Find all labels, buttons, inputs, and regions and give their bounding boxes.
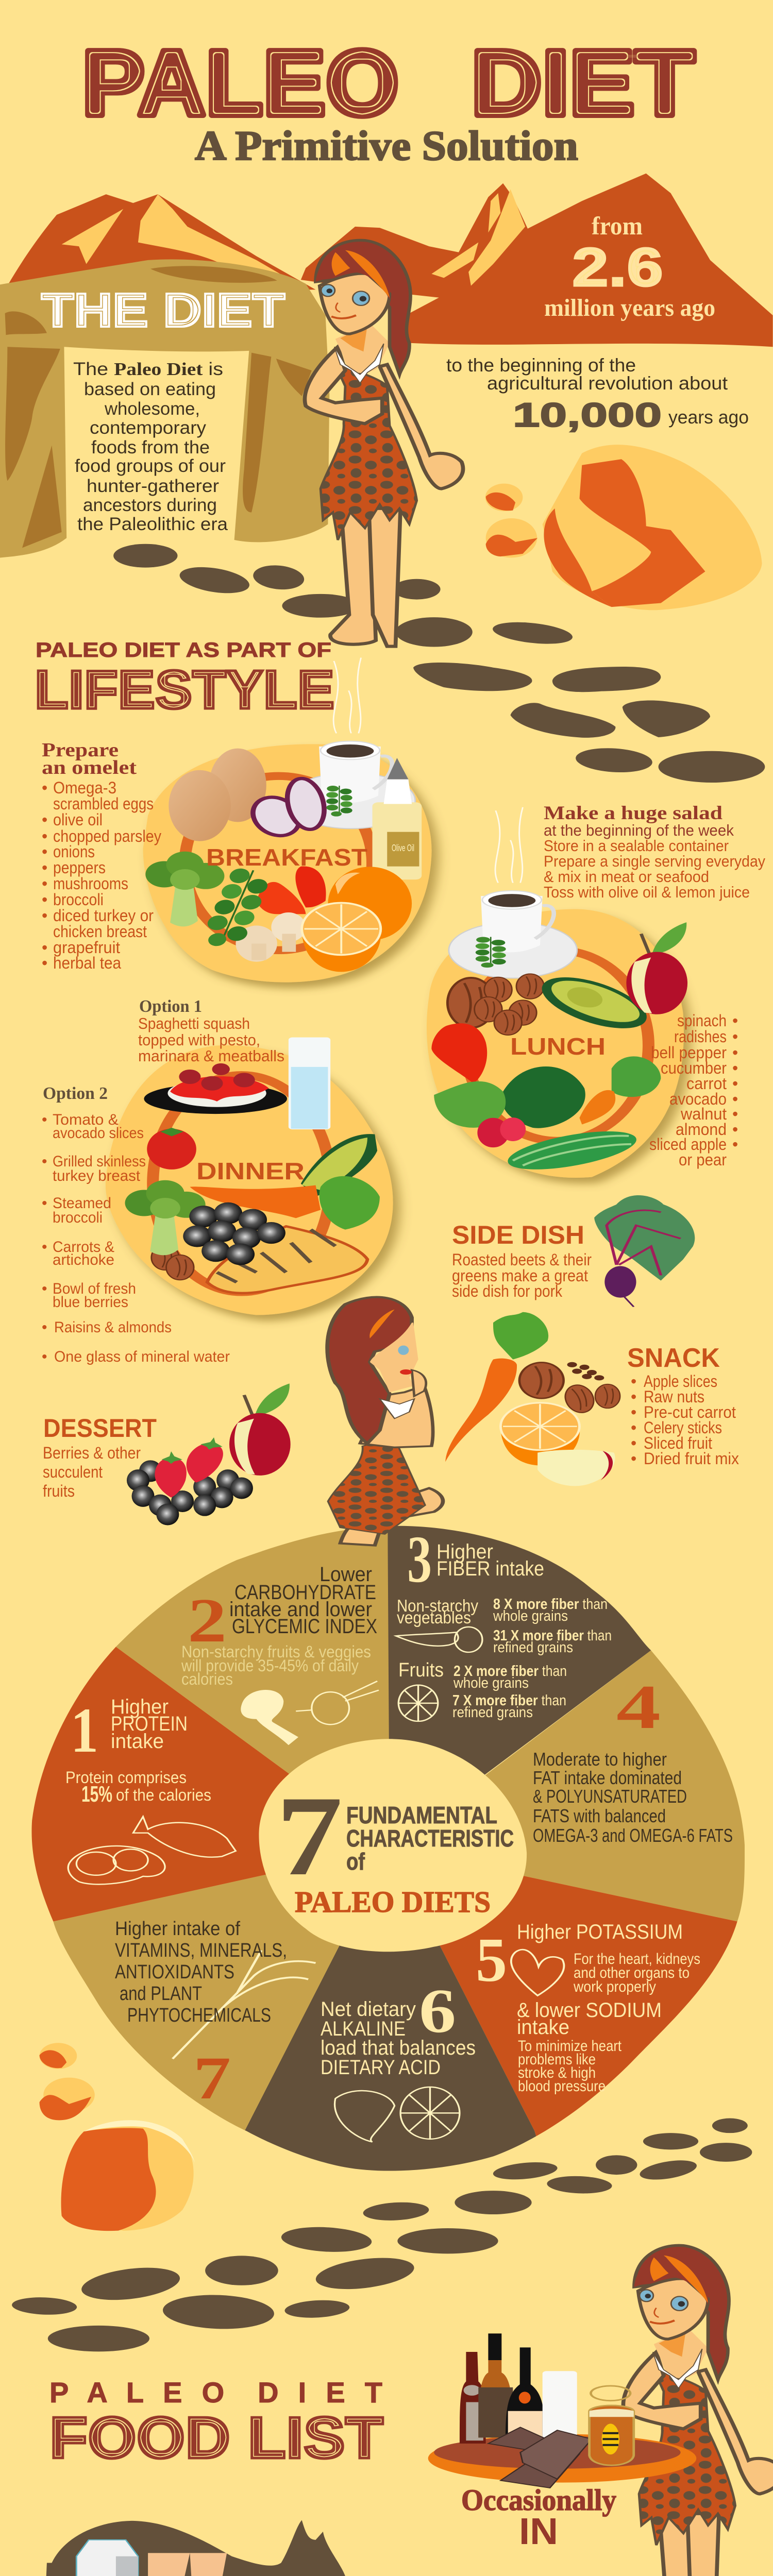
list: lunch ingredients: radishes	[674, 1027, 727, 1046]
text: the diet description: wholesome,	[104, 399, 200, 419]
segment 3: higher fiber: Fruits	[398, 1659, 444, 1681]
segment 4: moderate to higher fat: Moderate to higher	[533, 1749, 667, 1770]
text: dinner option 2: Carrots &	[53, 1239, 114, 1256]
segment 2: lower carbohydrate: CARBOHYDRATE	[234, 1581, 376, 1604]
heading: snack: SNACK	[627, 1343, 720, 1373]
text: dinner option 2: Steamed	[53, 1195, 111, 1212]
list: snack items: Sliced fruit	[644, 1434, 712, 1452]
segment 5: potassium and sodium: 5	[476, 1925, 507, 1995]
heading: side dish: SIDE DISH	[452, 1221, 584, 1249]
segment 1: higher protein	[65, 1695, 211, 1807]
list: lunch ingredients: •	[732, 1027, 738, 1046]
text: the diet description: food groups of our	[75, 456, 226, 476]
segment 7: vitamins and minerals: VITAMINS, MINERALS,	[115, 1940, 287, 1961]
text: prepare an omelet: herbal tea	[53, 954, 121, 972]
text: prepare an omelet: Prepare	[42, 739, 119, 761]
heading: paleo diet food list: FOOD LIST	[49, 2405, 383, 2471]
list: lunch ingredients: •	[732, 1090, 738, 1108]
character: woman with tray	[623, 2245, 773, 2576]
subtitle: A Primitive Solution	[195, 122, 578, 169]
label: lunch: LUNCH	[510, 1033, 606, 1060]
footprints: middle trail	[11, 2118, 752, 2351]
text: prepare an omelet: •	[42, 827, 47, 845]
text: prepare an omelet: mushrooms	[53, 874, 128, 893]
text: dessert description: fruits	[43, 1482, 75, 1500]
text: dinner option 2: broccoli	[53, 1209, 103, 1226]
segment 1: higher protein: intake	[111, 1730, 164, 1753]
center: 7 fundamental characteristic of paleo diets: 7	[276, 1773, 343, 1900]
icon: beet	[594, 1195, 695, 1307]
text: dinner option 2: •	[42, 1153, 47, 1170]
list: lunch ingredients: cucumber	[661, 1059, 727, 1077]
segment 3: higher fiber: 8 X more fiber than	[493, 1596, 608, 1613]
text: the diet description: contemporary	[90, 418, 207, 438]
heading: paleo diet food list	[49, 2376, 383, 2471]
segment 3: higher fiber: 2 X more fiber than	[453, 1663, 567, 1680]
text: the diet description: ancestors during	[83, 495, 217, 515]
text: dinner option 2: blue berries	[53, 1294, 128, 1311]
label: occasionally in	[461, 2483, 616, 2552]
segment 5: potassium and sodium: To minimize heart	[518, 2038, 622, 2055]
segment 2: lower carbohydrate: 2	[188, 1586, 227, 1655]
label: occasionally in: Occasionally	[461, 2483, 616, 2517]
list: snack items: •	[631, 1434, 636, 1452]
list: lunch ingredients: •	[732, 1120, 738, 1139]
text: the diet description: the Paleolithic era	[77, 514, 228, 534]
segment 7: vitamins and minerals: 7	[193, 2044, 231, 2112]
list: lunch ingredients: •	[732, 1043, 738, 1062]
text: dinner option 1: Spaghetti squash	[138, 1014, 250, 1032]
text: dessert description: Berries & other	[43, 1444, 141, 1462]
list: lunch ingredients: avocado	[669, 1090, 727, 1108]
text: prepare an omelet: •	[42, 778, 47, 797]
segment 2: lower carbohydrate: intake and lower	[229, 1598, 372, 1621]
segment 4: moderate to higher fat	[533, 1672, 733, 1846]
list: lunch ingredients: •	[732, 1011, 738, 1030]
segment 3: higher fiber: Non-starchy	[397, 1596, 478, 1615]
label: olive oil: Olive Oil	[392, 843, 414, 853]
out foods: boar	[17, 2520, 414, 2576]
text: make a huge salad: & mix in meat or seafood	[544, 868, 709, 886]
text: prepare an omelet: diced turkey or	[53, 906, 154, 925]
list: lunch ingredients: •	[732, 1105, 738, 1123]
text: side dish description: Roasted beets & their	[452, 1250, 592, 1269]
segment 3: higher fiber: 31 X more fiber than	[493, 1628, 612, 1644]
segment 2: lower carbohydrate: GLYCEMIC INDEX	[232, 1615, 377, 1638]
list: snack items: Raw nuts	[644, 1387, 704, 1406]
segment 5: potassium and sodium: work properly	[573, 1978, 656, 1995]
text: to the agricultural revolution	[446, 354, 749, 434]
segment 3: higher fiber: vegetables	[397, 1608, 471, 1627]
text: dinner option 1: Option 1	[139, 997, 202, 1016]
text: prepare an omelet: chicken breast	[53, 922, 147, 941]
text: prepare an omelet: peppers	[53, 858, 106, 877]
text: prepare an omelet: •	[42, 874, 47, 893]
segment 6: net dietary alkaline: Net dietary	[321, 1998, 416, 2021]
text: dinner option 2	[42, 1084, 230, 1365]
list: lunch ingredients: •	[732, 1074, 738, 1093]
text: dinner option 2: •	[42, 1239, 47, 1256]
label: dinner: DINNER	[196, 1158, 305, 1184]
segment 5: potassium and sodium: intake	[517, 2016, 569, 2039]
text: prepare an omelet: •	[42, 890, 47, 909]
heading: paleo diet food list: P A L E O D I E T	[49, 2376, 382, 2409]
title	[82, 31, 695, 135]
text: make a huge salad	[544, 803, 765, 901]
chart: seven characteristics wheel	[25, 1522, 750, 2175]
segment 1: higher protein: Protein comprises	[65, 1768, 187, 1787]
scene: mountains	[7, 174, 773, 347]
segment 2: lower carbohydrate: Non-starchy fruits & veggies	[181, 1642, 371, 1661]
heading: the diet: THE DIET	[41, 283, 285, 337]
segment 3: higher fiber: 3	[407, 1522, 432, 1597]
text: dinner option 2: turkey breast	[53, 1167, 141, 1184]
footprints: top	[113, 544, 441, 618]
segment 2: lower carbohydrate: Lower	[320, 1563, 372, 1586]
text: prepare an omelet: •	[42, 810, 47, 829]
list: snack items: •	[631, 1387, 636, 1406]
list: snack items: •	[631, 1449, 636, 1468]
list: lunch ingredients: •	[732, 1059, 738, 1077]
timeline: from 2.6 million years ago: from	[592, 211, 643, 240]
segment 6: net dietary alkaline	[321, 1976, 476, 2079]
list: snack items: •	[631, 1403, 636, 1421]
text: side dish description: side dish for pork	[452, 1282, 563, 1300]
list: snack items: •	[631, 1372, 636, 1391]
segment 1: higher protein: 15%	[81, 1782, 112, 1807]
segment 1: higher protein: PROTEIN	[111, 1713, 188, 1735]
timeline: from 2.6 million years ago: 2.6	[572, 237, 663, 298]
text: prepare an omelet: •	[42, 858, 47, 877]
text: prepare an omelet: an omelet	[42, 757, 137, 778]
plate: breakfast	[143, 658, 432, 982]
segment 6: net dietary alkaline: DIETARY ACID	[321, 2056, 441, 2079]
segment 6: net dietary alkaline: 6	[419, 1976, 456, 2046]
text: prepare an omelet: Omega-3	[53, 778, 116, 797]
list: lunch ingredients: sliced apple	[649, 1135, 727, 1154]
text: side dish description	[452, 1250, 592, 1300]
segment 2: lower carbohydrate: calories	[181, 1670, 233, 1688]
segment 4: moderate to higher fat: & POLYUNSATURATED	[533, 1786, 687, 1807]
text: make a huge salad: at the beginning of the week	[544, 821, 734, 839]
list: snack items	[631, 1372, 739, 1468]
icon: carrot and citrus	[396, 1627, 482, 1721]
heading: paleo diet as part of lifestyle: PALEO DIET AS PART OF	[36, 639, 331, 662]
segment 5: potassium and sodium: For the heart, kidneys	[574, 1951, 700, 1968]
text: to the agricultural revolution: agricultural revolution about	[487, 372, 728, 394]
text: the diet description: foods from the	[91, 437, 210, 457]
text: prepare an omelet: •	[42, 954, 47, 972]
list: lunch ingredients: walnut	[680, 1105, 727, 1123]
text: prepare an omelet: onions	[53, 842, 95, 861]
text: to the agricultural revolution: years ago	[668, 406, 749, 428]
text: the diet description: based on eating	[84, 379, 216, 399]
text: dinner option 1: topped with pesto,	[138, 1031, 260, 1049]
icon: fish and meat	[68, 1817, 236, 1884]
segment 4: moderate to higher fat: FATS with balanced	[533, 1805, 666, 1826]
text: dinner option 2: Option 2	[43, 1084, 108, 1103]
segment 3: higher fiber: refined grains	[452, 1704, 533, 1721]
text: prepare an omelet: chopped parsley	[53, 827, 161, 845]
center: 7 fundamental characteristic of paleo diets: FUNDAMENTAL	[346, 1802, 497, 1828]
list: lunch ingredients	[649, 1011, 738, 1169]
list: snack items: Dried fruit mix	[644, 1449, 739, 1468]
segment 7: vitamins and minerals: and PLANT	[120, 1983, 202, 2005]
icon: wheat	[173, 1951, 315, 2059]
list: snack items: Pre-cut carrot	[644, 1403, 736, 1421]
segment 5: potassium and sodium: problems like	[518, 2051, 596, 2068]
icon: leaf and citrus	[335, 2087, 460, 2142]
text: prepare an omelet: olive oil	[53, 810, 103, 829]
list: snack items: •	[631, 1418, 636, 1437]
segment 4: moderate to higher fat: FAT intake dominated	[533, 1767, 682, 1788]
segment 5: potassium and sodium: blood pressure	[518, 2078, 606, 2095]
segment 2: lower carbohydrate: will provide 35-45% of daily	[181, 1656, 359, 1675]
list: snack items: Celery sticks	[644, 1418, 722, 1437]
center: 7 fundamental characteristic of paleo diets: PALEO DIETS	[295, 1885, 491, 1919]
icon: heart	[511, 1950, 564, 1995]
plate: lunch	[427, 807, 687, 1178]
heading: paleo diet as part of lifestyle: LIFESTYLE	[35, 659, 334, 720]
text: dinner option 2: artichoke	[53, 1251, 114, 1268]
scene: stone dolmen	[0, 259, 329, 557]
title: DIET	[471, 31, 695, 135]
segment 7: vitamins and minerals: PHYTOCHEMICALS	[127, 2005, 271, 2026]
icon: dessert fruits	[127, 1383, 291, 1526]
segment 5: potassium and sodium: Higher POTASSIUM	[517, 1921, 683, 1943]
label: occasionally in: IN	[519, 2511, 558, 2552]
text: make a huge salad: Make a huge salad	[544, 803, 722, 824]
segment 3: higher fiber: FIBER intake	[436, 1557, 544, 1580]
segment 3: higher fiber: refined grains	[493, 1639, 573, 1656]
character: crouching woman	[327, 1297, 443, 1546]
list: lunch ingredients: carrot	[686, 1074, 727, 1093]
segment 5: potassium and sodium	[476, 1921, 700, 2095]
timeline: from 2.6 million years ago	[544, 211, 715, 321]
text: dinner option 1	[138, 997, 284, 1065]
segment 1: higher protein: 1	[71, 1695, 98, 1766]
text: dinner option 2: •	[42, 1195, 47, 1212]
segment 5: potassium and sodium: and other organs to	[574, 1964, 690, 1981]
text: prepare an omelet: grapefruit	[53, 938, 120, 957]
segment 2: lower carbohydrate	[181, 1563, 377, 1688]
text: dinner option 2: Bowl of fresh	[53, 1280, 136, 1297]
text: prepare an omelet: •	[42, 906, 47, 925]
segment 1: higher protein: of the calories	[116, 1786, 211, 1804]
text: dinner option 2: Grilled skinless	[53, 1153, 146, 1170]
segment 3: higher fiber: whole grains	[453, 1675, 529, 1691]
segment 3: higher fiber: 7 X more fiber than	[452, 1692, 566, 1709]
text: the diet description: The Paleo Diet is	[73, 359, 223, 379]
segment 7: vitamins and minerals	[115, 1918, 287, 2112]
occasionally in foods: tray	[428, 2333, 696, 2488]
segment 5: potassium and sodium: stroke & high	[518, 2064, 596, 2081]
center: 7 fundamental characteristic of paleo diets: CHARACTERISTIC	[346, 1825, 514, 1852]
segment 4: moderate to higher fat: 4	[616, 1672, 661, 1742]
label: breakfast: BREAKFAST	[206, 844, 367, 871]
segment 5: potassium and sodium: & lower SODIUM	[517, 1999, 662, 2022]
text: prepare an omelet: •	[42, 938, 47, 957]
character: standing woman	[305, 240, 463, 647]
segment 7: vitamins and minerals: ANTIOXIDANTS	[115, 1961, 234, 1983]
center: 7 fundamental characteristic of paleo diets	[276, 1773, 514, 1919]
text: dessert description: succulent	[43, 1463, 103, 1481]
text: prepare an omelet	[42, 739, 161, 972]
text: dessert description	[43, 1444, 141, 1500]
list: lunch ingredients: almond	[676, 1120, 727, 1139]
text: side dish description: greens make a great	[452, 1266, 588, 1285]
text: prepare an omelet: broccoli	[53, 890, 104, 909]
text: the diet description: hunter-gatherer	[87, 476, 219, 496]
rocks: lower left	[40, 2043, 195, 2231]
text: dinner option 2: avocado slices	[53, 1125, 144, 1142]
footprints: right	[396, 617, 765, 783]
icon: snack foods	[445, 1312, 620, 1486]
center: 7 fundamental characteristic of paleo diets: of	[346, 1848, 365, 1875]
list: lunch ingredients: spinach	[677, 1011, 727, 1030]
rocks: top right	[485, 445, 762, 610]
list: lunch ingredients: •	[732, 1135, 738, 1154]
list: lunch ingredients: bell pepper	[651, 1043, 727, 1062]
text: dinner option 2: •	[42, 1319, 47, 1336]
heading: dessert: DESSERT	[43, 1414, 157, 1443]
segment 3: higher fiber	[397, 1522, 612, 1721]
text: dinner option 1: marinara & meatballs	[138, 1047, 284, 1065]
segment 3: higher fiber: whole grains	[493, 1608, 568, 1624]
icon: broccoli and beet	[241, 1681, 379, 1745]
plate: dinner	[106, 1037, 393, 1315]
text: to the agricultural revolution: 10,000	[513, 396, 662, 434]
segment 6: net dietary alkaline: load that balances	[321, 2037, 476, 2059]
list: lunch ingredients: or pear	[679, 1150, 727, 1169]
text: prepare an omelet: scrambled eggs	[53, 794, 154, 813]
list: snack items: Apple slices	[644, 1372, 717, 1391]
segment 3: higher fiber: Higher	[436, 1540, 493, 1563]
text: dinner option 2: Tomato &	[53, 1111, 119, 1128]
segment 6: net dietary alkaline: ALKALINE	[321, 2018, 406, 2040]
segment 7: vitamins and minerals: Higher intake of	[115, 1918, 240, 1940]
text: dinner option 2: •	[42, 1348, 47, 1365]
text: make a huge salad: Toss with olive oil & lemon juice	[544, 883, 750, 901]
text: dinner option 2: •	[42, 1111, 47, 1128]
text: dinner option 2: Raisins & almonds	[54, 1319, 172, 1336]
text: prepare an omelet: •	[42, 842, 47, 861]
text: to the agricultural revolution: to the beginning of the	[446, 354, 636, 376]
segment 1: higher protein: Higher	[111, 1696, 169, 1718]
text: the diet description	[73, 359, 228, 534]
text: dinner option 2: •	[42, 1280, 47, 1297]
timeline: from 2.6 million years ago: million years ago	[544, 294, 715, 321]
text: dinner option 2: One glass of mineral water	[54, 1348, 230, 1365]
text: make a huge salad: Store in a sealable container	[544, 837, 729, 855]
title: PALEO	[82, 31, 399, 135]
